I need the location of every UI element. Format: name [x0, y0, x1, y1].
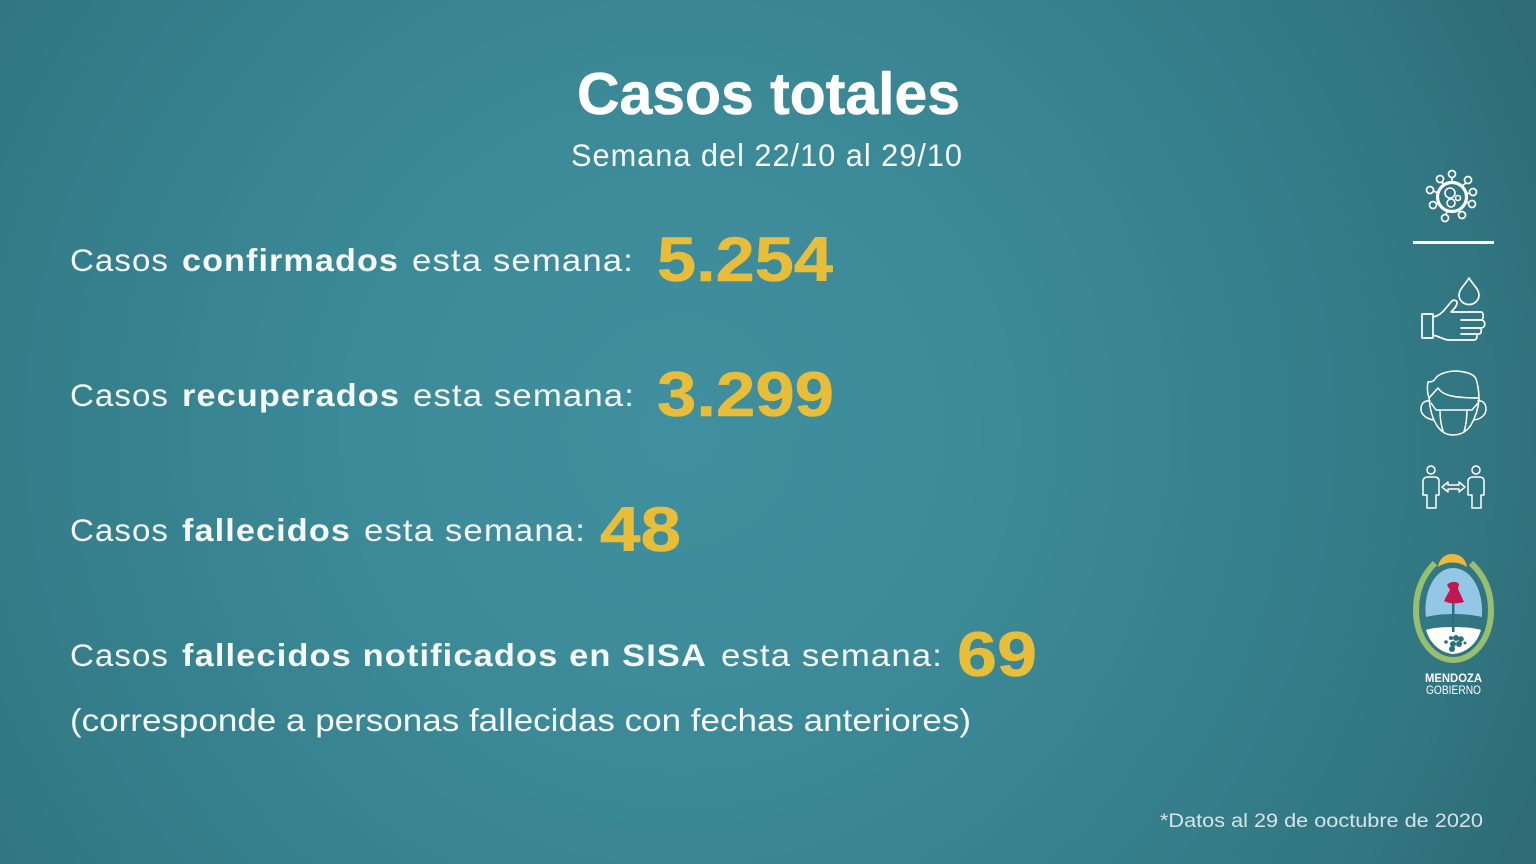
row: fallecidos notificados en SISA: esta semana:: [721, 637, 943, 673]
row: casos fallecidos: fallecidos: [182, 512, 351, 548]
subtitle: Semana del 22/10 al 29/10: [571, 137, 963, 173]
logo laurel: [1416, 563, 1491, 660]
icon: social distancing: [1423, 466, 1484, 508]
icon: face mask: [1421, 371, 1486, 435]
logo white ground: [1426, 627, 1481, 654]
logo sun: [1438, 554, 1467, 567]
row: casos recuperados: Casos: [70, 377, 169, 413]
row: casos fallecidos: 48: [600, 495, 681, 565]
note: fechas anteriores: (corresponde a personas fallecidas con fechas anteriores): [70, 702, 971, 738]
row: casos fallecidos: Casos: [70, 512, 169, 548]
row: casos confirmados: [70, 225, 833, 295]
footnote: *Datos al 29 de ooctubre de 2020: [1160, 811, 1483, 832]
row: casos confirmados: Casos: [70, 242, 169, 278]
logo text: Mendoza: MENDOZA: [1425, 671, 1482, 685]
row: casos confirmados: esta semana:: [412, 242, 634, 278]
icon: virus: [1426, 170, 1476, 222]
icon: hand washing: [1422, 278, 1485, 340]
row: casos recuperados: recuperados: [182, 377, 400, 413]
active icon underline: [1413, 241, 1494, 244]
row: casos recuperados: 3.299: [657, 360, 834, 430]
logo pole: [1452, 600, 1454, 632]
row: fallecidos notificados en SISA: [70, 620, 1037, 690]
row: fallecidos notificados en SISA: fallecidos notificados en SISA: [182, 637, 707, 673]
logo: Mendoza Gobierno: [1416, 554, 1491, 697]
row: casos confirmados: confirmados: [182, 242, 399, 278]
logo text: Gobierno: GOBIERNO: [1426, 685, 1481, 697]
row: casos fallecidos: [70, 495, 681, 565]
row: casos confirmados: 5.254: [657, 225, 833, 295]
row: casos recuperados: [70, 360, 834, 430]
row: casos recuperados: esta semana:: [413, 377, 635, 413]
row: fallecidos notificados en SISA: 69: [957, 620, 1037, 690]
row: fallecidos notificados en SISA: Casos: [70, 637, 169, 673]
title: Casos totales: [577, 61, 960, 127]
logo sky: [1426, 568, 1482, 617]
row: casos fallecidos: esta semana:: [364, 512, 586, 548]
logo cap: [1444, 582, 1464, 603]
logo grapes: [1444, 635, 1466, 652]
